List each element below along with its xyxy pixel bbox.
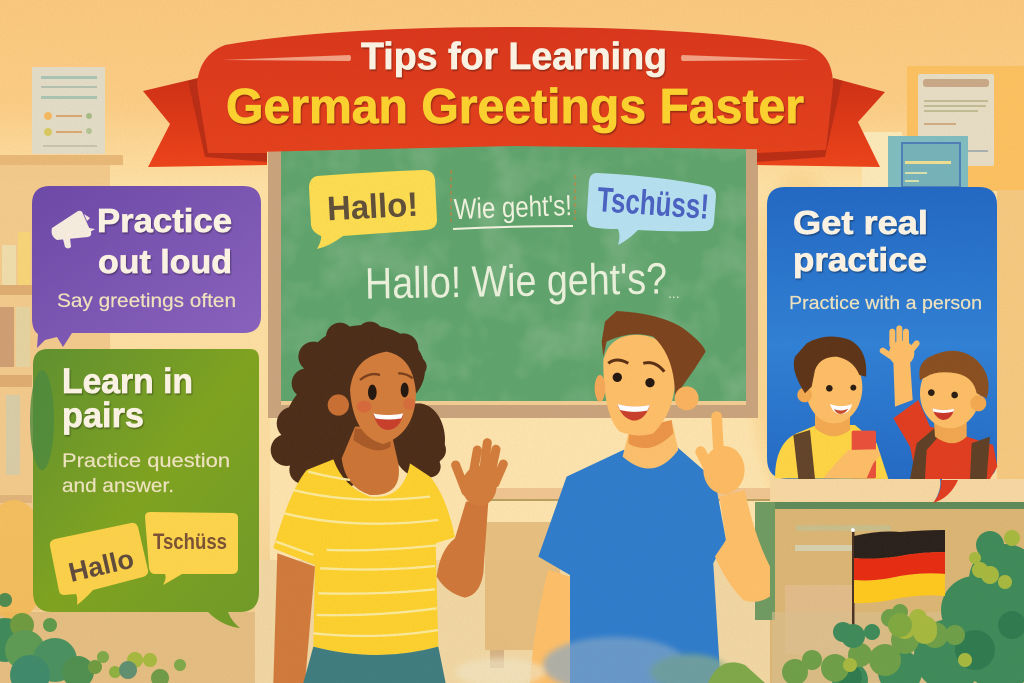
banner body bbox=[197, 27, 833, 153]
boy shirt bbox=[538, 447, 726, 683]
caption: Practice question bbox=[62, 451, 230, 472]
heading line 2: practice bbox=[793, 241, 927, 278]
girl hair bbox=[271, 322, 446, 490]
boy right arm bbox=[715, 490, 770, 602]
ribbon tails bbox=[143, 78, 885, 167]
speech bubble: Tschüss bbox=[587, 173, 716, 245]
boy hand bbox=[701, 417, 745, 494]
boy bbox=[530, 311, 770, 683]
background: left bookshelf bbox=[0, 155, 123, 620]
mist over lower figures bbox=[455, 637, 730, 683]
girl left arm bbox=[273, 553, 315, 683]
red tail of blue panel bbox=[933, 480, 958, 503]
caption bbox=[62, 451, 230, 497]
sticker: Tschüss bbox=[145, 512, 238, 585]
heading line 2: out loud bbox=[98, 243, 232, 280]
girl forearm and hand bbox=[437, 443, 503, 598]
bush: lower right bbox=[708, 530, 1024, 683]
waving arm and hand bbox=[883, 328, 917, 407]
girl neck bbox=[342, 427, 399, 495]
sticker: Hallo bbox=[50, 523, 148, 605]
icon: German flag bbox=[851, 528, 945, 628]
book bbox=[888, 136, 968, 187]
panel: practice out loud bbox=[32, 186, 261, 348]
speech bubble: Hallo bbox=[309, 170, 437, 249]
chalk text: Wie geht's bbox=[451, 170, 575, 229]
bush: foreground over flag pole bbox=[833, 613, 937, 648]
caption: Practice with a person bbox=[789, 293, 982, 313]
heading: Get real bbox=[793, 204, 928, 241]
background: left poster bbox=[32, 67, 105, 154]
chalk dots: ... bbox=[668, 285, 680, 301]
boy neck bbox=[623, 420, 678, 469]
caption: and answer. bbox=[62, 476, 174, 497]
title line 2: German Greetings Faster bbox=[226, 80, 804, 134]
boy left arm bbox=[530, 570, 570, 683]
green shade patch bbox=[30, 370, 54, 470]
characters bbox=[271, 311, 770, 683]
background: small teacher desk bbox=[485, 522, 560, 668]
boy with phone bbox=[775, 337, 888, 479]
bush: lower left bbox=[0, 593, 186, 683]
girl shirt bbox=[273, 459, 455, 655]
title line 1: Tips for Learning bbox=[361, 36, 667, 78]
background: right desk bbox=[755, 479, 1024, 683]
icon: megaphone bbox=[52, 211, 95, 248]
speech bubble: Hallo: Hallo! bbox=[326, 186, 419, 228]
boy waving bbox=[883, 328, 997, 479]
boy face bbox=[603, 335, 675, 435]
title banner bbox=[143, 27, 885, 167]
chalk text: Wie geht's: Wie geht's! bbox=[453, 190, 572, 226]
illustration: two boys bbox=[775, 328, 997, 479]
sticker: Hallo: Hallo bbox=[66, 544, 137, 588]
background: wall ledge bbox=[490, 488, 780, 501]
chalk text: Hallo! Wie geht's?: Hallo! Wie geht's? bbox=[365, 254, 667, 309]
girl jeans bbox=[303, 647, 446, 683]
panel: get real practice bbox=[767, 187, 997, 503]
speech bubble: Tschüss: Tschüss! bbox=[596, 180, 710, 227]
heading line 2: pairs bbox=[62, 396, 144, 435]
background: right poster and books bbox=[862, 66, 1024, 490]
shirt stripes bbox=[276, 472, 440, 636]
banner shines bbox=[222, 55, 810, 61]
sticker: Tschüss: Tschüss bbox=[153, 529, 227, 554]
caption: Say greetings often bbox=[57, 291, 236, 312]
heading: Learn in bbox=[62, 362, 193, 401]
heading: Practice bbox=[97, 202, 232, 239]
girl bbox=[271, 322, 503, 683]
chalkboard bbox=[268, 140, 758, 418]
boy hair bbox=[602, 311, 706, 397]
girl face bbox=[350, 352, 416, 444]
panel: learn in pairs bbox=[30, 349, 259, 628]
